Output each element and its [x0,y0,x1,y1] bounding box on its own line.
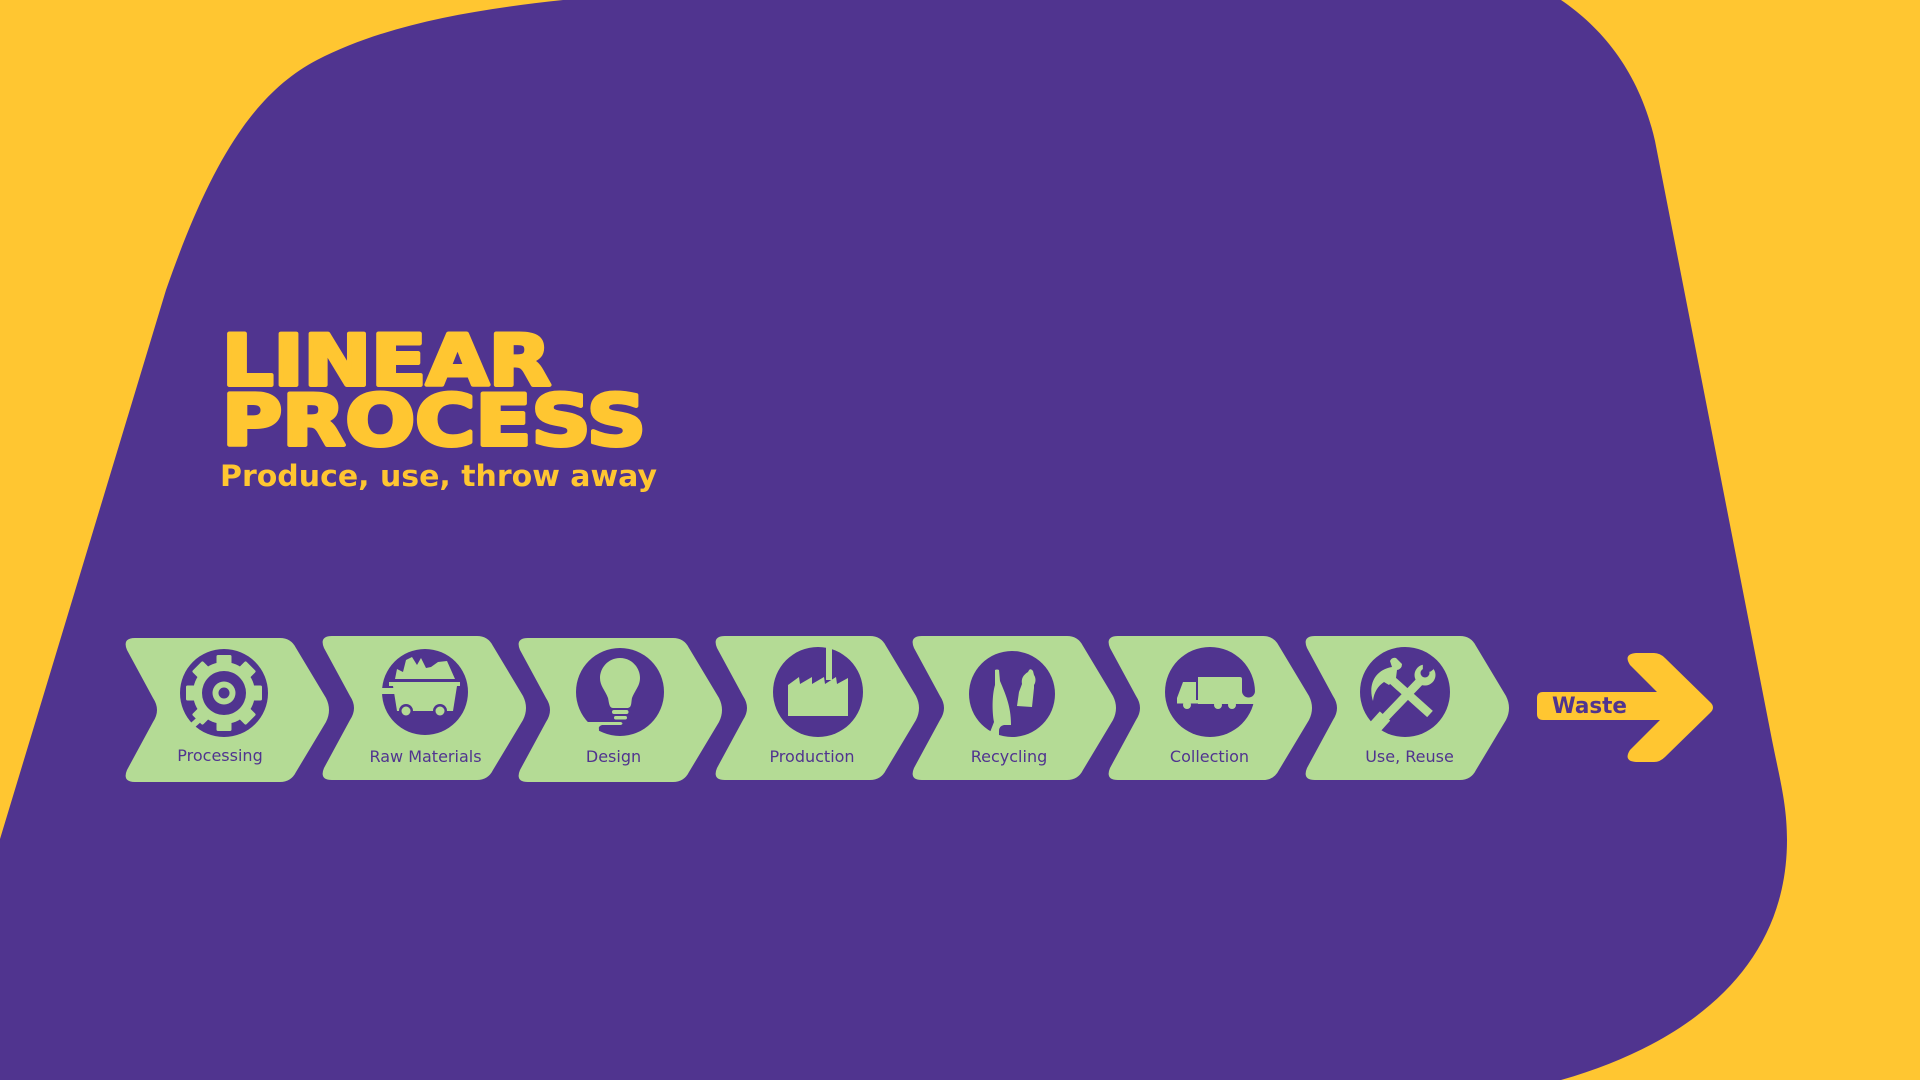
step: Raw Materials [323,636,526,780]
label: Production [769,747,855,766]
icon: hammer and wrench [1360,647,1450,737]
step: Production [716,636,919,780]
step: Collection [1109,636,1312,780]
label: Raw Materials [369,747,482,766]
label: Recycling [971,747,1047,766]
label: Design [586,747,641,766]
step: Use, Reuse [1306,636,1509,780]
step: Design [519,638,722,782]
icon: factory [773,640,863,737]
icon: truck [1165,647,1262,737]
title: PROCESS [222,380,646,462]
label: Waste [1552,694,1627,719]
title: LINEAR [222,320,551,402]
step: Processing [126,638,329,782]
icon: gear [180,649,268,737]
icon: light bulb [570,648,664,745]
step: Recycling [913,636,1116,780]
subtitle: Produce, use, throw away [220,459,657,493]
label: Processing [177,746,263,765]
icon: bottles [969,651,1055,745]
arrow: Waste [1537,653,1713,762]
label: Collection [1170,747,1249,766]
label: Use, Reuse [1365,747,1454,766]
title [222,320,646,462]
icon: mine cart [375,649,468,735]
